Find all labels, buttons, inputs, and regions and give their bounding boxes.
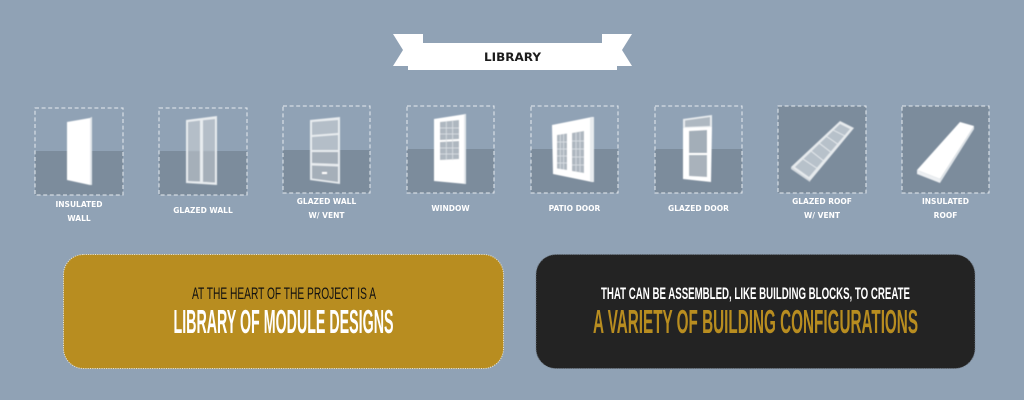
label: glazed roof w/ vent: [792, 197, 852, 220]
label: patio door: PATIO DOOR: [549, 204, 601, 213]
tile: window: [407, 106, 494, 213]
icon: glazed door panel: [683, 115, 712, 182]
label: insulated roof: ROOF: [934, 211, 957, 220]
panel: library of module designs: LIBRARY OF MODULE DESIGNS: [174, 303, 394, 340]
tile: glazed wall: [159, 108, 247, 215]
label: glazed wall w/ vent: [297, 197, 356, 220]
icon: window panel: [434, 114, 466, 184]
label: glazed wall w/ vent: GLAZED WALL: [297, 197, 356, 206]
tile: patio door: [531, 106, 618, 213]
label: insulated wall: WALL: [67, 214, 91, 223]
tile: glazed wall with vent: [283, 106, 370, 220]
label: insulated roof: [922, 197, 969, 220]
icon: glazed wall with vent panel: [310, 117, 340, 184]
label: insulated roof: INSULATED: [922, 197, 969, 206]
label: glazed wall: GLAZED WALL: [173, 206, 233, 215]
banner: library: [393, 34, 632, 70]
tile: insulated roof: [902, 106, 989, 220]
panel: library of module designs: [64, 254, 504, 368]
icon: patio door panel: [552, 117, 594, 182]
icon: insulated wall panel: [67, 117, 92, 185]
label: glazed door: GLAZED DOOR: [668, 204, 729, 213]
tile: insulated wall: [35, 108, 123, 223]
label: glazed roof w/ vent: W/ VENT: [804, 211, 841, 220]
label: insulated wall: INSULATED: [55, 200, 103, 209]
banner title: LIBRARY: [484, 50, 542, 64]
label: glazed roof w/ vent: GLAZED ROOF: [792, 197, 852, 206]
panel intro text: AT THE HEART OF THE PROJECT IS A: [192, 284, 376, 303]
icon: glazed roof panel: [791, 121, 854, 182]
tile: glazed roof with vent: [778, 106, 866, 220]
label: window: WINDOW: [431, 204, 470, 213]
label: insulated wall: [55, 200, 103, 223]
panel: variety of building configurations: [536, 254, 975, 368]
tile: glazed door: [655, 106, 742, 213]
label: glazed wall w/ vent: W/ VENT: [309, 211, 345, 220]
icon: glazed wall panel: [186, 116, 217, 185]
icon: insulated roof panel: [917, 122, 974, 183]
